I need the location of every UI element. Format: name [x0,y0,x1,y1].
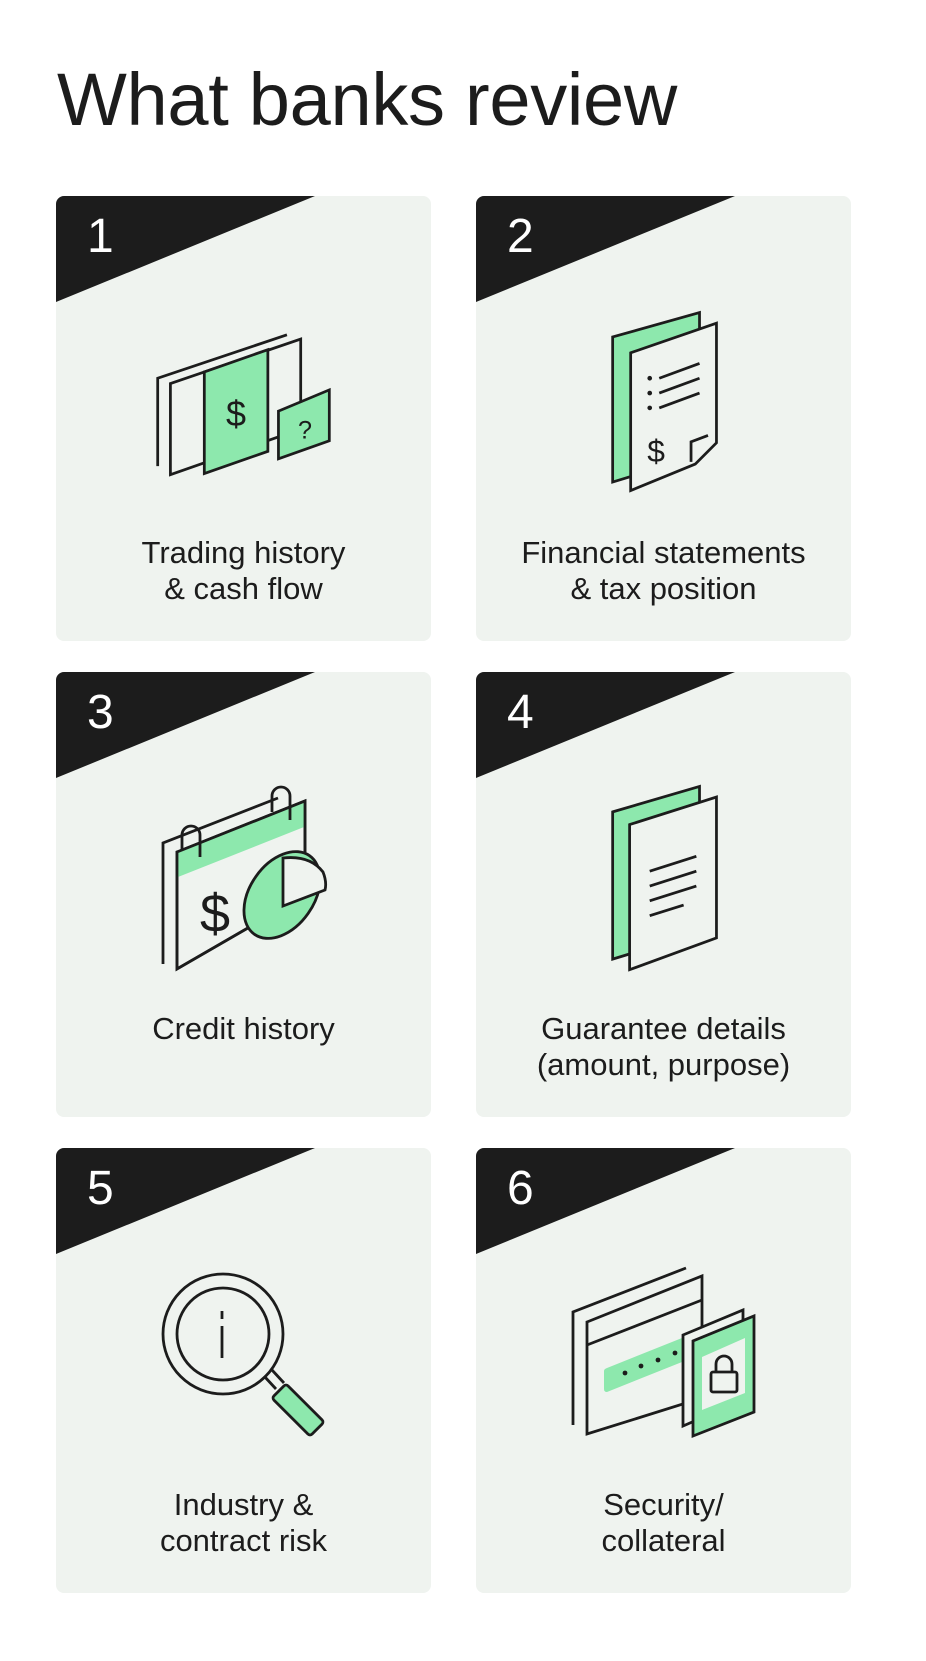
label: Financial statements [521,535,806,570]
icon: cash and question [156,334,331,477]
label: (amount, purpose) [537,1047,790,1082]
panel: 4 guarantee details: 4 [507,686,534,739]
label: collateral [601,1523,726,1558]
panel: 2 financial statements: 2 [507,210,534,263]
number badge 6 [476,1148,735,1254]
label [521,535,806,606]
number badge 5 [56,1148,315,1254]
label: contract risk [160,1523,327,1558]
label: & cash flow [164,571,323,606]
label [601,1487,726,1558]
icon: statement document [611,310,718,493]
label: Guarantee details [541,1011,786,1046]
panel: 4 guarantee details [476,672,851,1117]
icon: cash and question: ? [298,417,312,445]
label: Trading history [142,535,345,570]
title: What banks review [57,58,677,141]
number badge 1 [56,196,315,302]
panel: 6 security: 6 [507,1162,534,1215]
panel: 2 financial statements [476,196,851,641]
icon: magnifier [162,1272,324,1436]
icon: document [611,784,718,972]
panel: 5 industry risk: 5 [87,1162,114,1215]
label: & tax position [570,571,757,606]
icon: calendar and pie: $ [200,884,230,944]
label: Security/ [603,1487,724,1522]
panel: 3 credit history [56,672,431,1117]
panel: 3 credit history: 3 [87,686,114,739]
icon: calendar and pie [162,786,328,972]
number badge 4 [476,672,735,778]
label [142,535,346,606]
icon: statement document: $ [647,433,665,469]
label: Credit history [152,1011,335,1046]
label [160,1487,327,1558]
icon: cash and question: $ [226,393,246,434]
panel: 6 security [476,1148,851,1593]
panel: 5 industry risk [56,1148,431,1593]
label [537,1011,790,1082]
panel: 1 trading history: 1 [87,210,114,263]
icon: login window and lock [572,1266,756,1438]
label: Industry & [174,1487,313,1522]
number badge 3 [56,672,315,778]
number badge 2 [476,196,735,302]
panel: 1 trading history [56,196,431,641]
